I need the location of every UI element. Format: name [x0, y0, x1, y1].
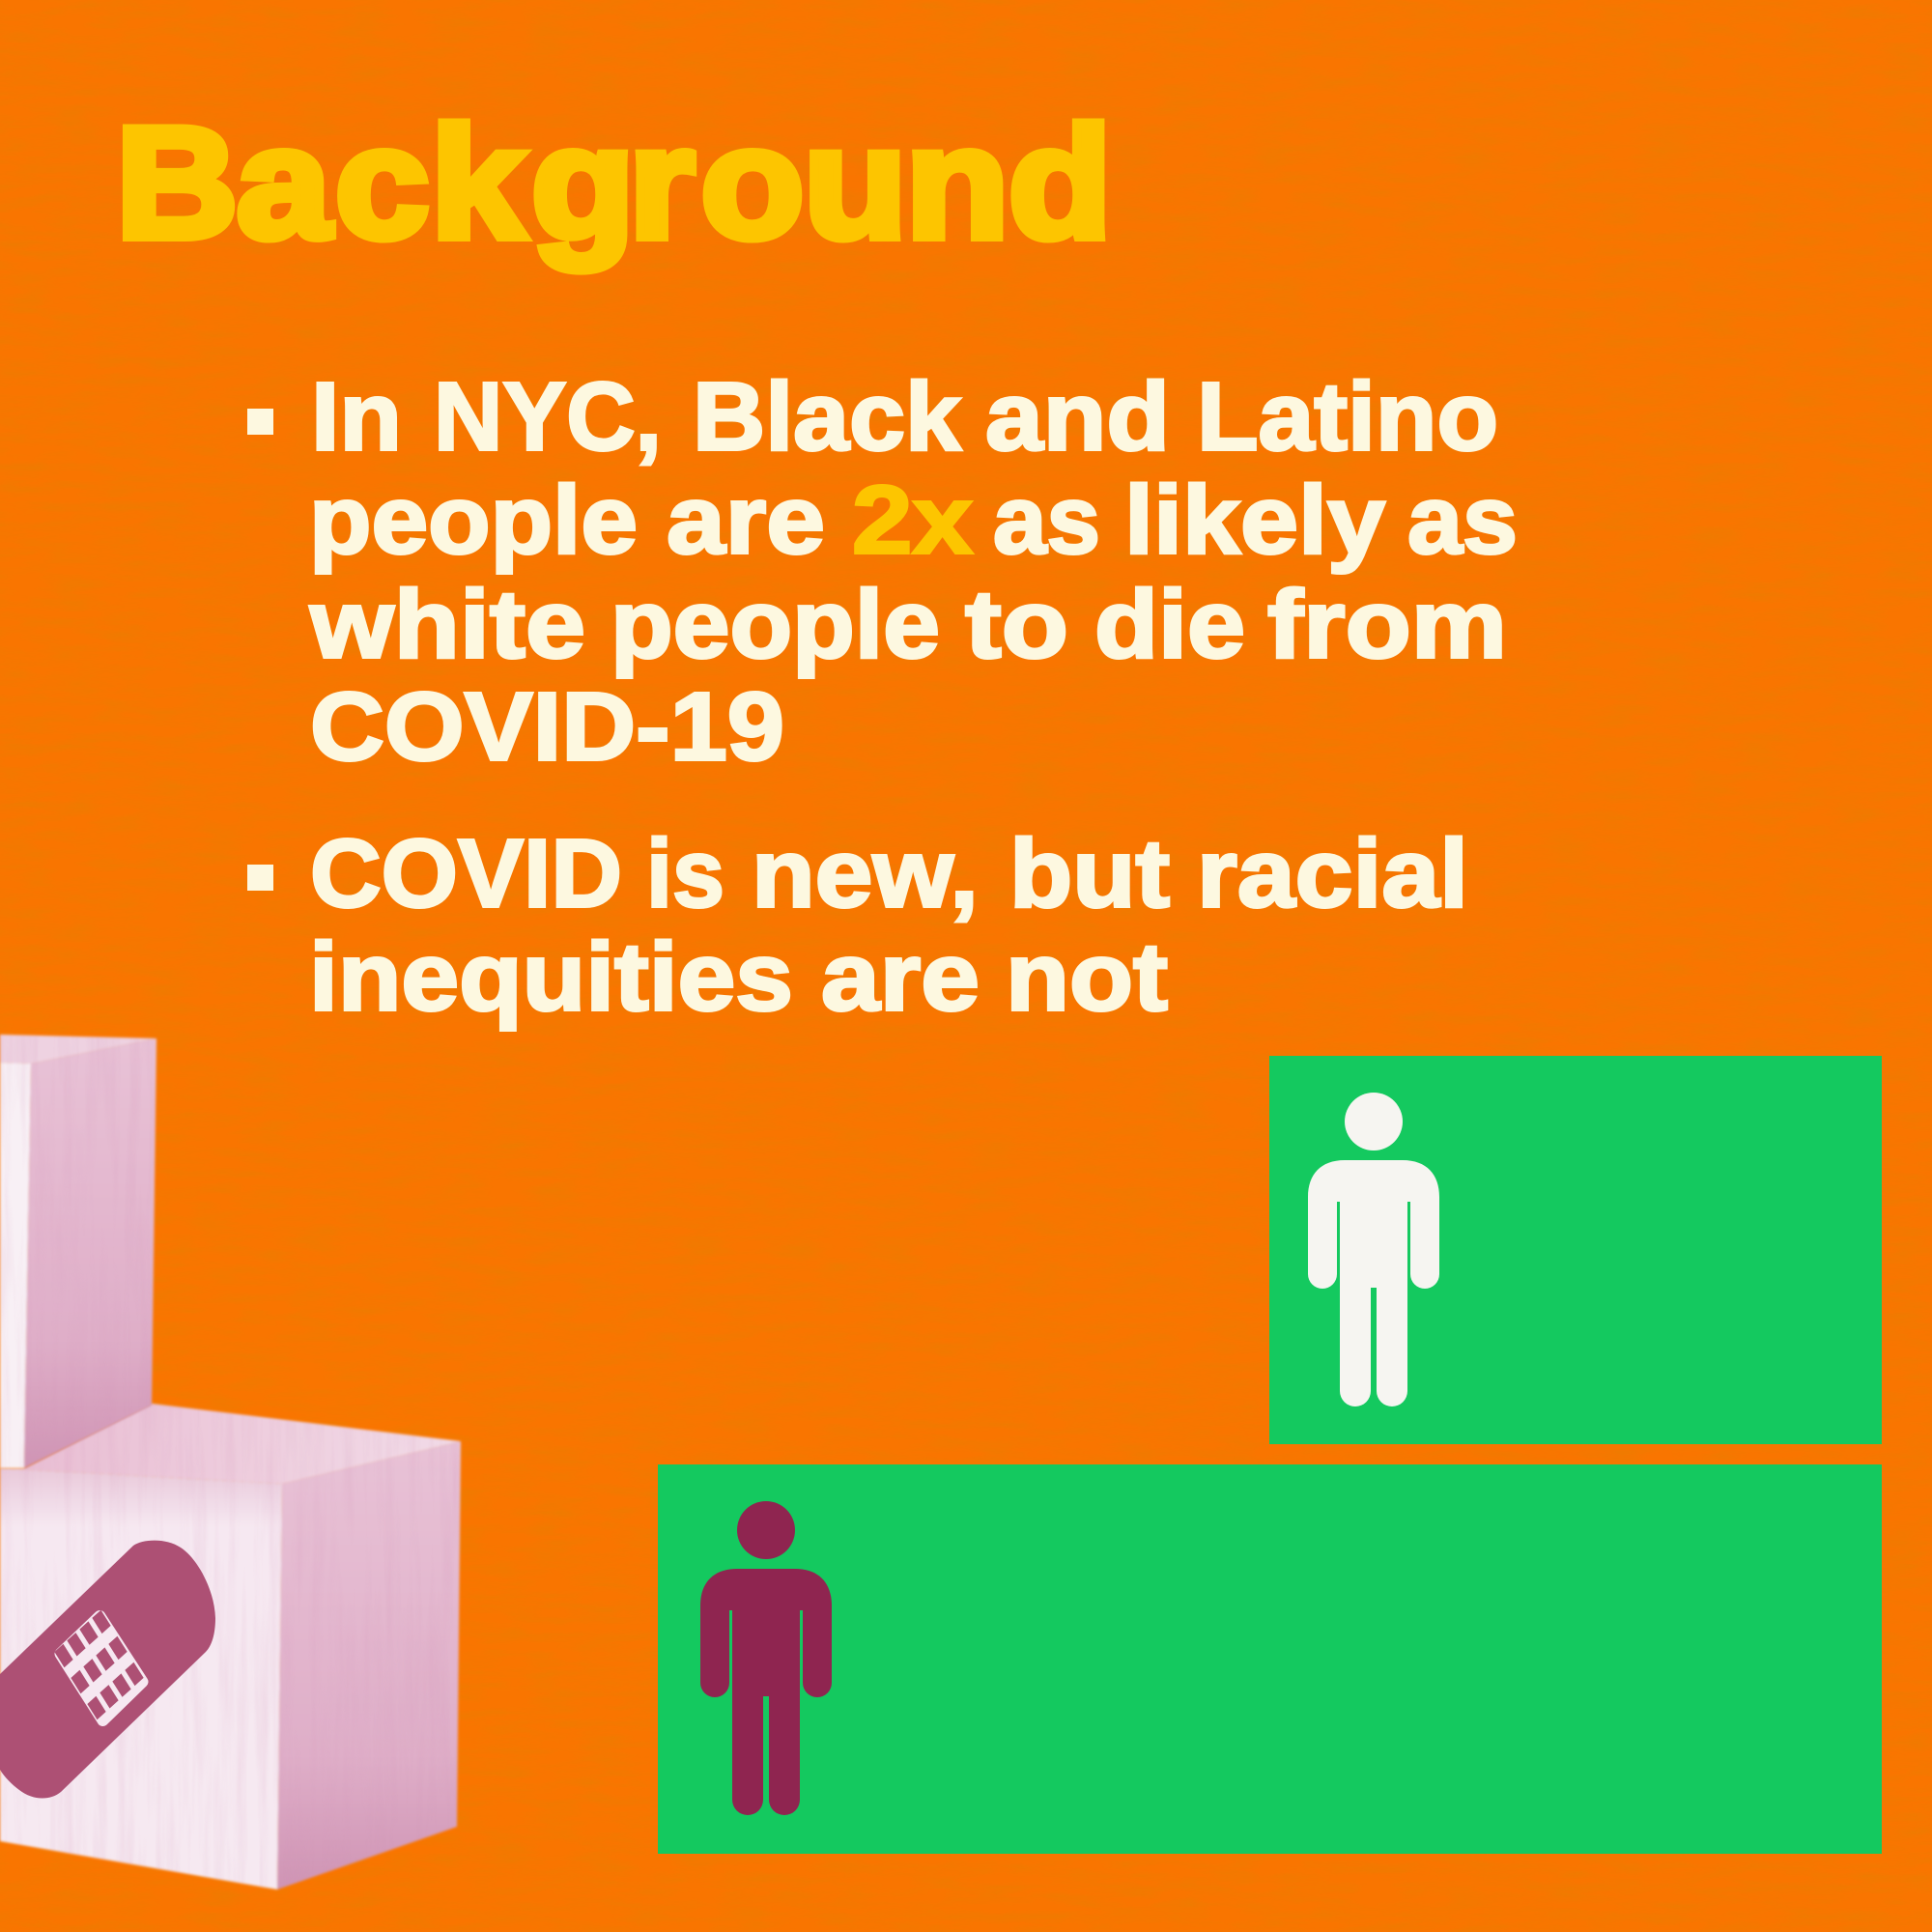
bullet two text: COVID [310, 819, 622, 927]
bullet one [247, 363, 1518, 781]
bullet two text: not [1006, 923, 1168, 1032]
bullet one text: white [309, 570, 585, 678]
bullet two text: new, [752, 819, 979, 927]
bullet one text: Black [693, 363, 961, 471]
bullet one text: likely [1124, 466, 1385, 574]
bullet one text: people [309, 466, 638, 574]
bullet two text: but [1009, 819, 1170, 927]
bullet list [247, 363, 1518, 1032]
bullet one text: 2x [852, 466, 973, 574]
bullet one text: from [1267, 570, 1507, 678]
lower block [0, 1404, 461, 1889]
bullet one text: people [611, 570, 940, 678]
bullet one text: to [965, 570, 1068, 678]
bullet marker [247, 865, 273, 891]
bullet two text: are [821, 923, 980, 1032]
bullet one text [309, 363, 1518, 781]
icon: white person [1308, 1093, 1439, 1406]
bullet two [247, 819, 1468, 1032]
bullet two text: racial [1197, 819, 1468, 927]
bullet one text: are [667, 466, 825, 574]
bar: white people [1269, 1056, 1882, 1444]
icon: bandage [0, 1541, 215, 1799]
bullet one text: Latino [1197, 363, 1498, 471]
bullet one text: In [311, 363, 402, 471]
bullet two text: inequities [309, 923, 793, 1032]
bullet one text: as [993, 466, 1100, 574]
bullet one text: NYC, [434, 363, 662, 471]
bullet two text: is [646, 819, 724, 927]
bullet one text: die [1094, 570, 1245, 678]
bullet one text: and [985, 363, 1170, 471]
bullet marker [247, 409, 273, 435]
bar: Black and Latino people [658, 1464, 1882, 1854]
icon: maroon person [700, 1501, 832, 1815]
bullet one text: COVID-19 [310, 672, 784, 781]
upper block [0, 1035, 156, 1468]
illustration: stacked blocks with bandage [0, 1024, 473, 1893]
bullet two text [309, 819, 1468, 1032]
bullet one text: as [1407, 466, 1518, 574]
title: Background [116, 95, 1112, 270]
